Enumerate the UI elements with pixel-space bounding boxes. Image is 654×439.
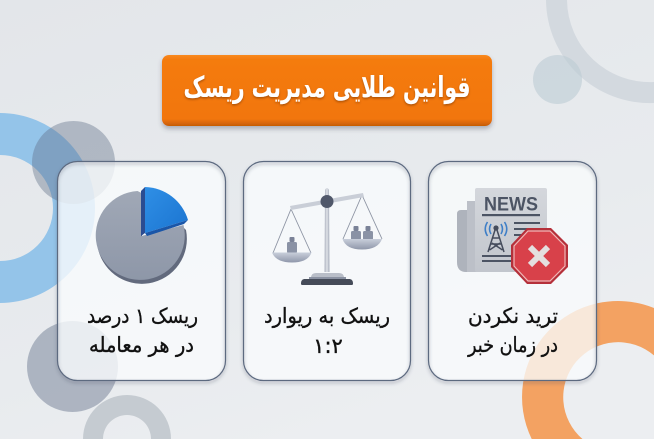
label: risk one percent: در هر معامله [89, 333, 194, 357]
label: risk one percent [87, 304, 198, 357]
label: risk to reward: ریسک به ریوارد [264, 304, 390, 328]
title text: قوانین طلایی مدیریت ریسک [184, 70, 470, 104]
label: risk to reward: ۱:۲ [313, 334, 343, 358]
label: risk one percent: ریسک ۱ درصد [87, 304, 198, 328]
panel: risk to reward [244, 162, 410, 380]
panel: no trading during news [428, 162, 596, 380]
label: risk to reward [264, 304, 390, 358]
icon: balance scale [272, 188, 382, 285]
title banner [162, 55, 492, 126]
label: no trading during news: ترید نکردن [468, 304, 558, 328]
icon: pie chart [96, 187, 188, 284]
label: no trading during news: در زمان خبر [467, 333, 558, 357]
panel: risk one percent [58, 162, 226, 380]
label: no trading during news [467, 304, 558, 357]
icon: newspaper with stop sign: NEWS [484, 194, 538, 216]
icon: newspaper with stop sign [457, 188, 568, 284]
